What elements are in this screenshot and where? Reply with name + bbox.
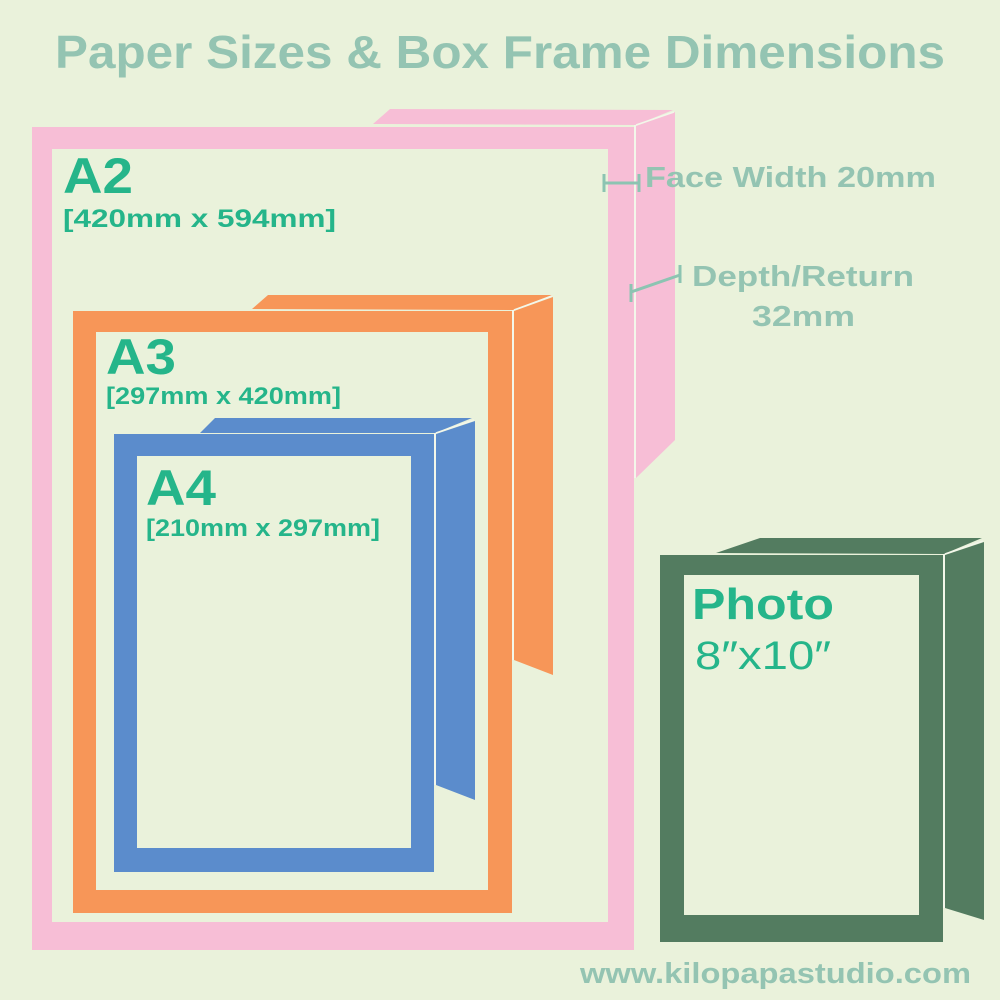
label: A4 dimensions: [210mm x 297mm] bbox=[146, 515, 380, 542]
label: A4: A4 bbox=[146, 460, 216, 516]
title: Paper Sizes & Box Frame Dimensions bbox=[55, 26, 945, 78]
label: depth: 32mm bbox=[752, 301, 855, 333]
footer url: www.kilopapastudio.com bbox=[579, 958, 971, 990]
label: A2 dimensions: [420mm x 594mm] bbox=[63, 205, 336, 233]
label: Photo: Photo bbox=[692, 580, 834, 629]
label: A3 dimensions: [297mm x 420mm] bbox=[106, 383, 341, 410]
frame: Photo bbox=[660, 538, 984, 942]
label: depth bbox=[692, 261, 914, 333]
marker: depth bbox=[631, 265, 680, 302]
marker: face width bbox=[604, 174, 639, 192]
label: Photo dimensions: 8″x10″ bbox=[695, 634, 831, 678]
label: face width: Face Width 20mm bbox=[645, 162, 936, 194]
label: A2: A2 bbox=[63, 148, 133, 204]
frame: A3 bbox=[73, 295, 553, 913]
label: A3: A3 bbox=[106, 329, 176, 385]
frame: A2 bbox=[32, 109, 675, 950]
frame: A4 bbox=[114, 418, 475, 872]
label: depth: Depth/Return bbox=[692, 261, 914, 293]
